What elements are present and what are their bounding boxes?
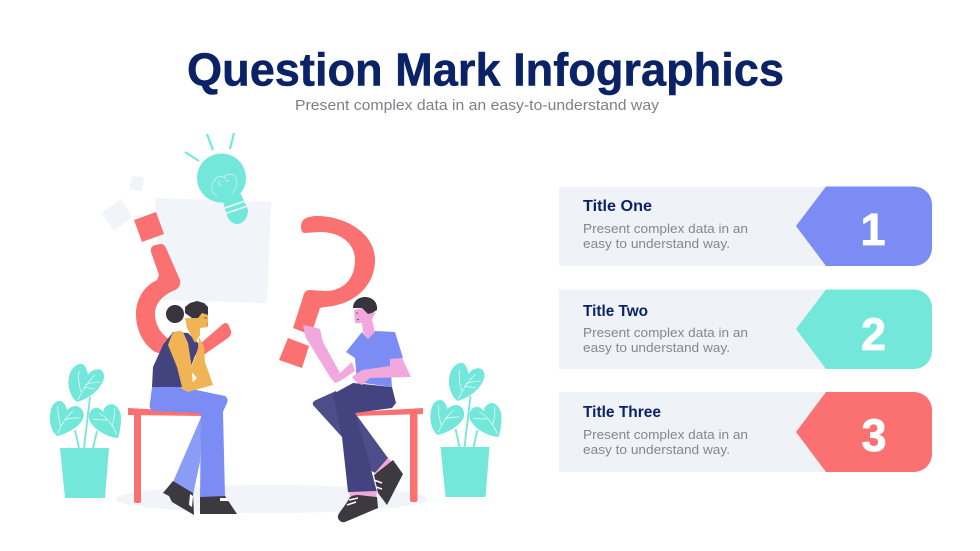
background paper square [155,198,271,303]
neck and face [354,308,376,339]
card heading: Title Three [583,404,661,421]
face details [356,313,359,320]
front leg [333,383,396,492]
card background [559,392,839,472]
number: 1 [860,204,886,255]
shoe laces [347,480,382,505]
right table [354,408,423,502]
card description: Present complex data in an [583,221,748,236]
back leg [338,413,388,473]
icon: light bulb [185,133,248,224]
number tag [796,186,932,266]
number tag [796,392,932,472]
card description: easy to understand way. [583,442,730,457]
boot highlights [189,494,229,507]
shoes [338,460,403,522]
number: 3 [861,410,887,461]
card background [559,290,839,369]
number: 2 [861,309,886,360]
card: title three [559,392,932,472]
upright question mark [279,216,375,368]
arm and hand holding question mark [303,325,355,383]
second arm [352,358,411,385]
number tag [796,290,932,369]
title: Question Mark Infographics [187,44,784,96]
plant left [50,364,121,498]
back leg [173,415,202,495]
hair [166,301,208,323]
man [303,297,411,522]
forearm [180,337,213,392]
shirt [346,331,403,387]
neck and face [185,313,208,343]
socks [349,458,393,500]
plant right [430,363,502,497]
card heading: Title One [583,198,652,215]
woman [150,301,237,515]
thigh [150,387,228,414]
card: title two [559,290,932,369]
card background [559,187,839,266]
left table [128,408,202,503]
hair [353,297,377,314]
card description: Present complex data in an [583,427,748,442]
card: title one [559,186,932,266]
card description: easy to understand way. [583,340,730,355]
torso [152,332,198,387]
illustration: two people with question marks [50,133,501,522]
floor shadow [116,485,428,513]
card heading: Title Two [583,303,648,320]
subtitle: Present complex data in an easy-to-understand way [295,97,660,114]
face details [204,318,208,324]
upper arm [168,331,193,387]
boots [163,481,237,515]
front leg [200,412,225,497]
card description: Present complex data in an [583,325,748,340]
inverted question mark [134,212,231,358]
decorative squares [102,176,144,231]
card description: easy to understand way. [583,236,730,251]
knee [313,391,345,437]
